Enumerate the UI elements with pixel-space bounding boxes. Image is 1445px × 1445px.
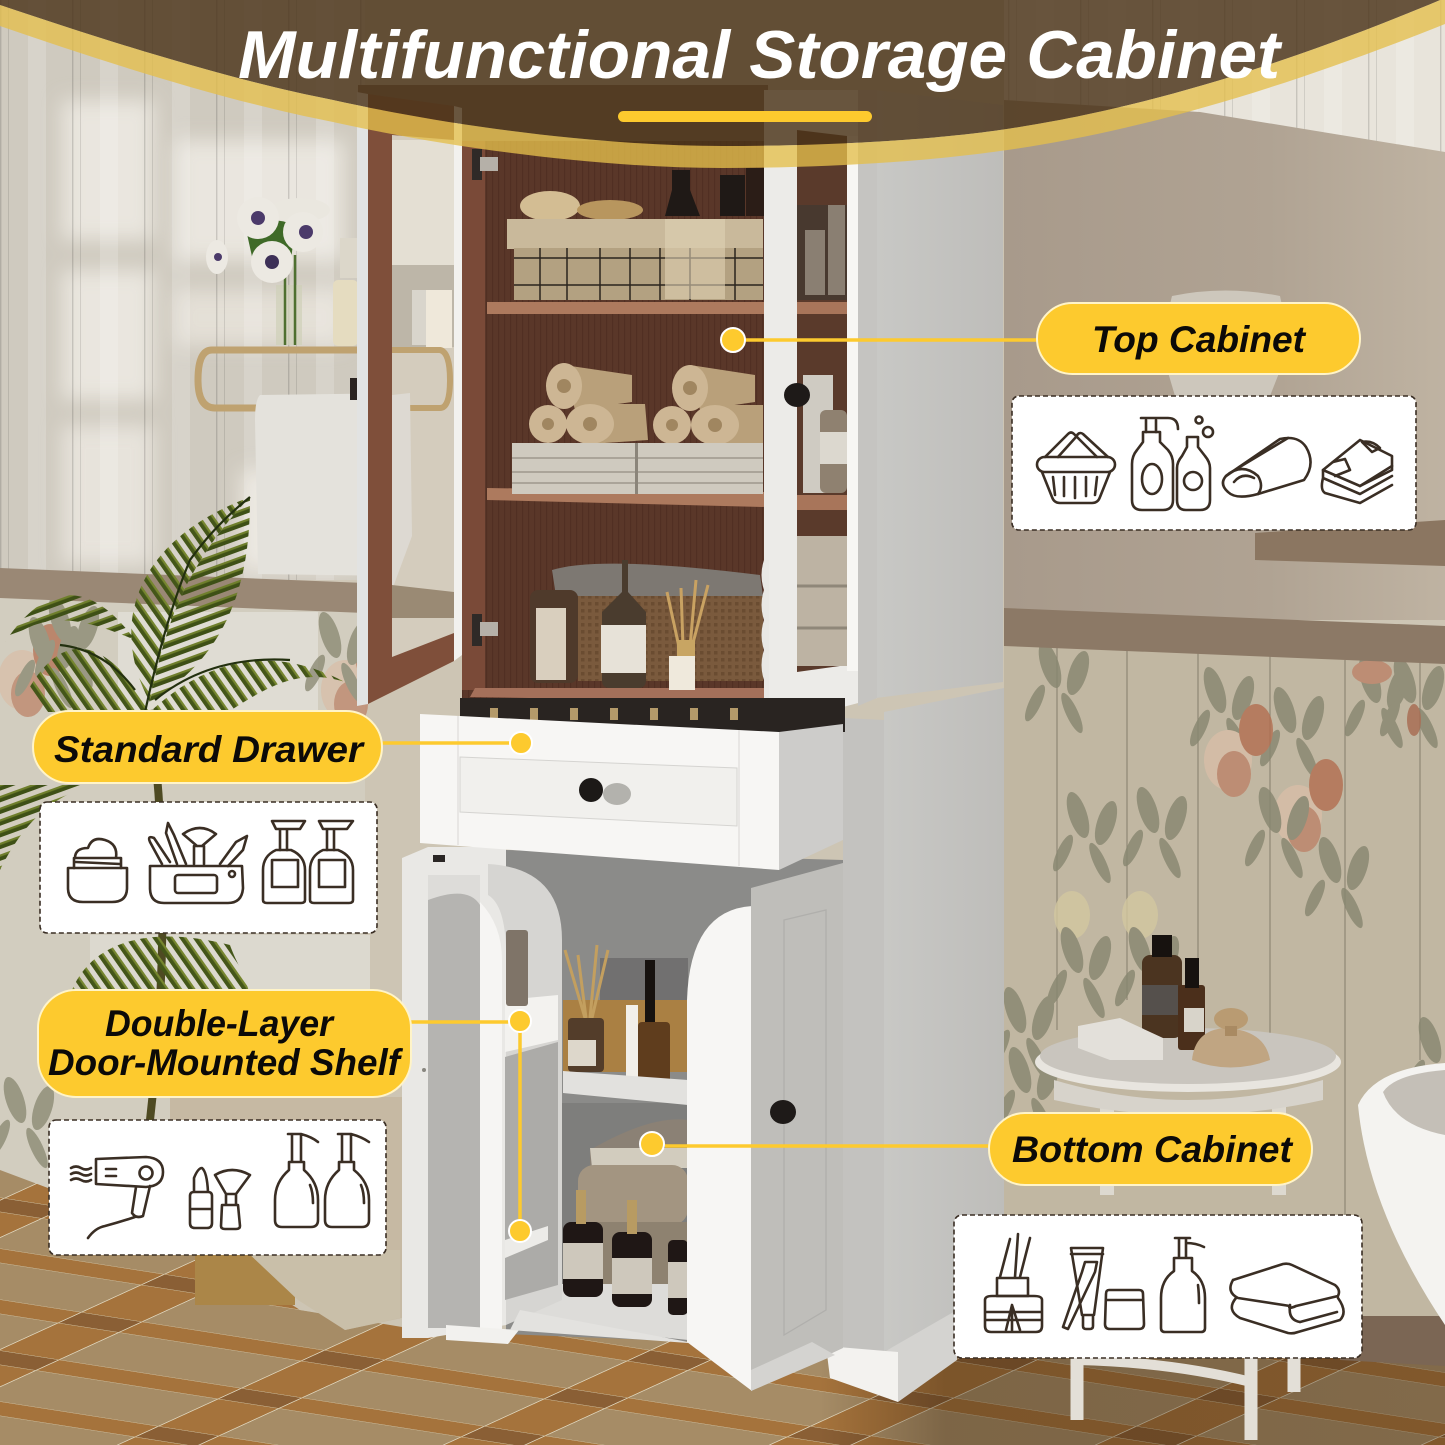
cabinet: lower tower: [402, 688, 1004, 1402]
icon: cream jar: [68, 839, 127, 902]
upper shelf items: [563, 945, 688, 1084]
side panel lower: [826, 688, 1004, 1402]
hinges: [472, 149, 498, 646]
brass hardware behind drawer: [460, 698, 845, 732]
banner curve: [0, 0, 1445, 168]
flower vase and shelf items: [206, 197, 358, 346]
upper shelf: basket and sponges: [507, 168, 765, 300]
leader line: [640, 1132, 990, 1156]
callout: top cabinet: [721, 303, 1416, 530]
cabinet: upper tower: [357, 85, 1003, 728]
basket and draped cloth: [170, 1097, 402, 1330]
label pill: Door-Mounted Shelf: [48, 1042, 404, 1083]
title banner: [0, 0, 1445, 168]
title text: Multifunctional Storage Cabinet: [238, 17, 1282, 93]
middle shelf: rolled towels: [529, 363, 763, 445]
middle shelf board: [563, 1071, 688, 1105]
label pill: Top Cabinet: [1092, 319, 1307, 360]
towel bar and towel: [198, 350, 450, 576]
left door with double-layer shelf: [402, 847, 688, 1344]
middle shelf: folded towels: [512, 443, 763, 494]
icon panel: [49, 1120, 386, 1255]
bathtub: [1358, 1063, 1445, 1325]
icon panel: [40, 802, 377, 933]
icon: basket: [1037, 432, 1115, 503]
lower right wallpaper: [986, 639, 1445, 1340]
plant: [0, 497, 345, 1120]
leader line: [382, 732, 532, 754]
lower shelf: towel, basket, bottles: [530, 560, 763, 690]
label pill: [989, 1113, 1312, 1185]
door knob: [770, 1100, 796, 1124]
icon: toothpaste and jar: [1063, 1248, 1144, 1329]
lower shelf items: [520, 1119, 688, 1340]
icon: pump bottles: [263, 821, 353, 903]
icon panel: [1012, 396, 1416, 530]
icon: makeup bag: [149, 823, 247, 903]
side table with toiletries: [1035, 935, 1341, 1440]
callout: double-layer door-mounted shelf: [38, 990, 531, 1255]
icon: hair dryer: [71, 1157, 163, 1238]
drawer: [420, 714, 843, 870]
bottom cabinet interior: [506, 850, 843, 1348]
left glass door: [357, 92, 462, 706]
drawer knob: [579, 778, 631, 805]
shelves: [470, 302, 765, 702]
icon: rolled towel: [1223, 438, 1311, 497]
icon: folded towels: [1230, 1264, 1344, 1333]
callout: standard drawer: [33, 711, 532, 933]
right side panel upper: [876, 90, 1003, 698]
icon: lotion bottles: [275, 1134, 369, 1227]
icon: folded shirts: [1322, 440, 1392, 503]
icon: pump bottle: [1161, 1238, 1205, 1332]
leader line: [721, 328, 1038, 352]
callout: bottom cabinet: [640, 1113, 1362, 1358]
top cabinet interior: [358, 85, 768, 705]
icon panel: [954, 1215, 1362, 1358]
door knob: [784, 383, 810, 407]
floor tiles: [0, 1170, 1445, 1445]
label pill: Bottom Cabinet: [1012, 1129, 1294, 1170]
right door: [687, 863, 843, 1391]
label pill: [1037, 303, 1360, 374]
icon: lipstick and brush: [190, 1168, 250, 1229]
label pill: Double-Layer: [105, 1003, 336, 1044]
title underline: [618, 111, 872, 122]
lower left wallpaper: [0, 594, 390, 1238]
label pill: [33, 711, 382, 783]
leader lines: [411, 1010, 531, 1242]
label pill: Standard Drawer: [54, 729, 366, 770]
label pill: [38, 990, 411, 1097]
icon: reed diffuser: [985, 1234, 1042, 1332]
icon: soap bottles: [1132, 416, 1213, 510]
right glass door: [762, 90, 877, 728]
